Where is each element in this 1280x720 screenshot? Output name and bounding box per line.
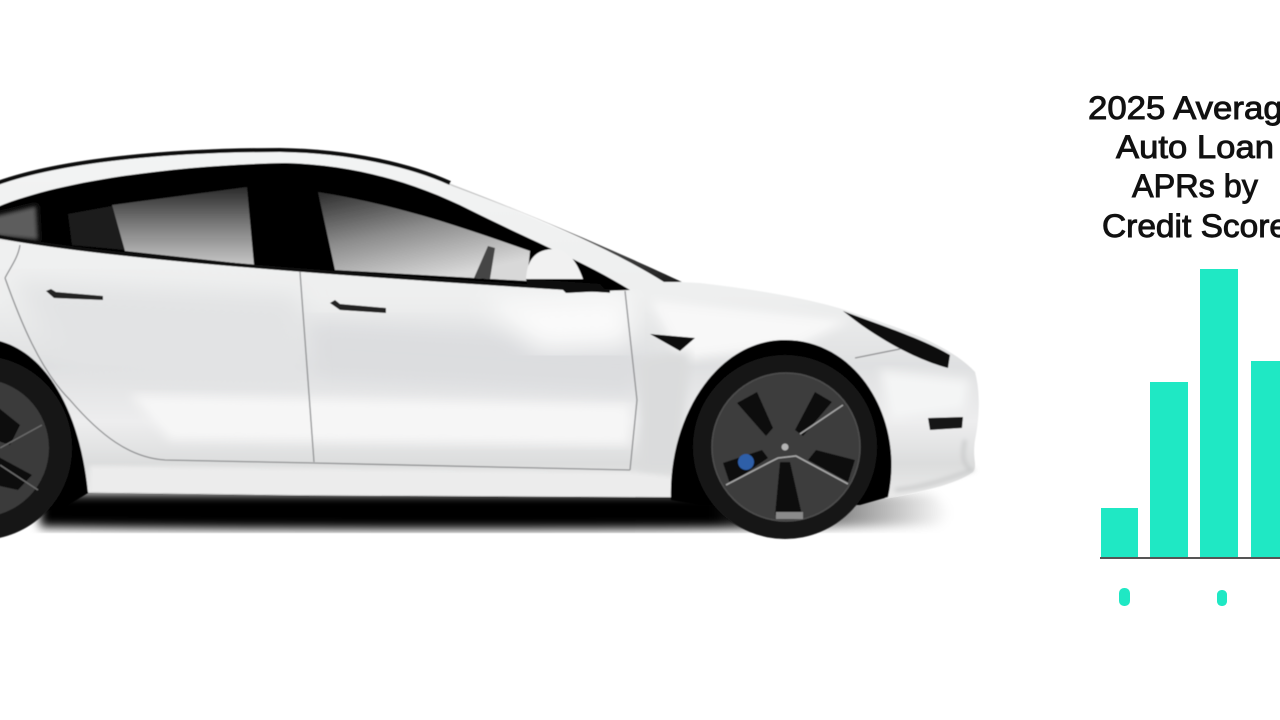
bar chart: average APR by credit score	[1100, 269, 1280, 606]
front door handle	[330, 300, 386, 313]
axis marker 1	[1119, 588, 1130, 606]
chart title: APRs by	[1132, 168, 1258, 204]
wing mirror	[526, 249, 606, 293]
front bumper crease	[895, 440, 972, 490]
rear wheel	[0, 340, 88, 540]
car body	[0, 150, 979, 498]
window surround	[0, 163, 630, 291]
bar 1	[1101, 508, 1138, 557]
bar 3	[1200, 269, 1238, 557]
chart title: 2025 Average	[1088, 90, 1280, 126]
ground shadow	[40, 494, 950, 529]
illustration: white electric sedan in side view	[0, 150, 979, 540]
chart title: Auto Loan	[1116, 129, 1274, 165]
axis marker 2	[1217, 590, 1227, 606]
headlight	[843, 311, 950, 368]
rear door handle	[46, 289, 103, 300]
brake caliper	[738, 454, 754, 470]
bar 2	[1150, 382, 1188, 557]
windshield band	[440, 180, 682, 282]
rear seat silhouette	[68, 206, 125, 250]
front air vent	[928, 417, 963, 430]
fender badge	[650, 334, 695, 351]
front seat silhouette	[474, 246, 495, 279]
chart title: Credit Score	[1102, 208, 1280, 244]
door seams	[5, 245, 900, 470]
front door glass	[318, 192, 530, 281]
spoke highlights	[726, 405, 848, 485]
rear door glass	[112, 187, 254, 265]
quarter glass	[0, 206, 38, 240]
front wheel	[671, 340, 891, 539]
wheel spoke openings	[723, 392, 855, 515]
roof line	[0, 150, 450, 184]
bar 4	[1251, 361, 1280, 557]
chart title	[1088, 90, 1280, 244]
belt line	[0, 236, 610, 291]
chart axis line	[1100, 557, 1280, 559]
